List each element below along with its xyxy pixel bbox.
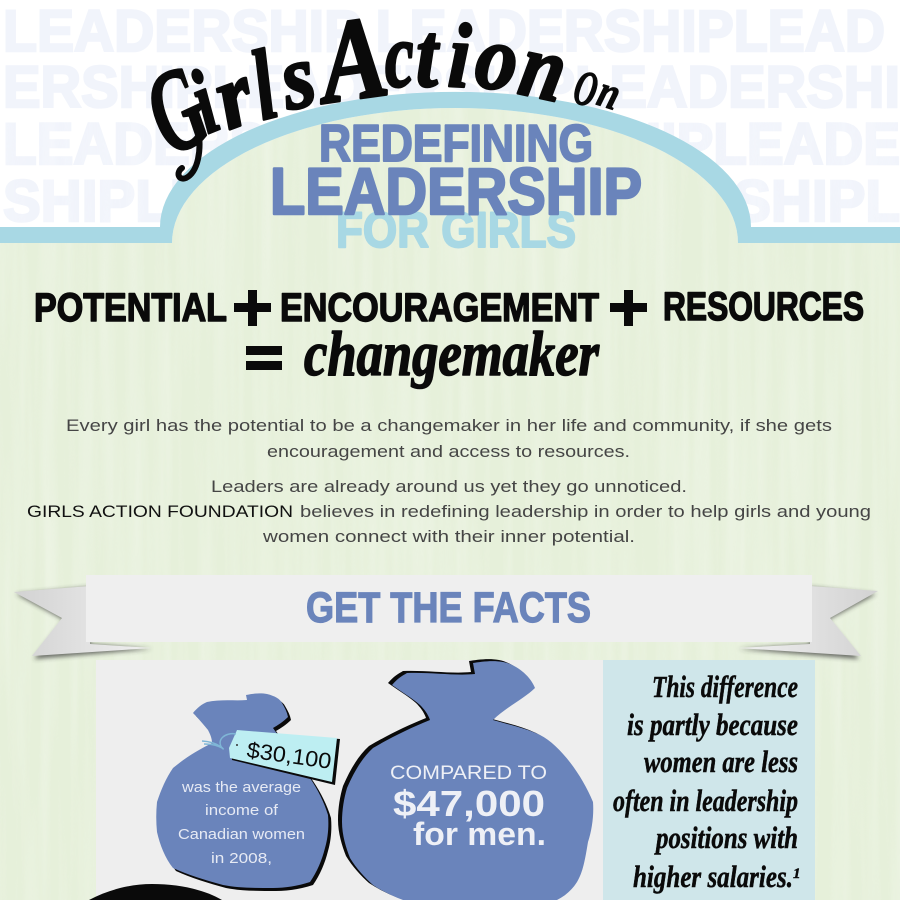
intro text: GIRLS ACTION FOUNDATION	[27, 502, 293, 521]
title: Girls Action On: r	[200, 42, 268, 149]
icon: small money bag	[156, 693, 331, 891]
equation: changemaker	[304, 318, 600, 389]
wallpaper: repeated LEADERSHIP: SHIPLEADERSHIPLEADERSHIPL	[3, 169, 900, 234]
title: Girls Action On: c	[382, 5, 416, 108]
title: Redefining Leadership for Girls: REDEFINING	[319, 115, 593, 173]
title: Redefining Leadership for Girls: LEADERSHIP	[270, 154, 642, 228]
intro text: encouragement and access to resources.	[267, 442, 630, 461]
small bag text: Canadian women	[178, 826, 305, 843]
panel: explanation: positions with	[654, 820, 798, 855]
title: Girls Action On: n	[512, 14, 575, 122]
title: Girls Action On: o	[471, 5, 524, 111]
big bag text: for men.	[413, 816, 546, 852]
small bag text	[178, 779, 305, 867]
intro text: Every girl has the potential to be a changemaker in her life and community, if she gets	[66, 416, 832, 435]
title: Girls Action On: i	[446, 5, 473, 108]
title: Girls Action On: t	[416, 5, 440, 106]
icon: price tag $30,100: $30,100	[245, 737, 333, 774]
small bag text: in 2008,	[211, 850, 272, 867]
small bag text: was the average	[181, 779, 301, 796]
panel: explanation: women are less	[644, 744, 798, 779]
title: Girls Action On: i	[177, 52, 231, 153]
panel: explanation: 1	[793, 866, 800, 882]
panel: income comparison	[96, 660, 603, 900]
title: Girls Action On	[126, 0, 627, 179]
title: Girls Action On: O	[568, 59, 603, 118]
arch and band	[0, 92, 900, 243]
big bag text: COMPARED TO	[390, 763, 547, 784]
title: Redefining Leadership for Girls: FOR GIRLS	[336, 202, 576, 258]
icon: large money bag	[338, 659, 593, 900]
title: Girls Action On: s	[270, 23, 324, 130]
intro text: believes in redefining leadership in order to help girls and young	[300, 502, 871, 521]
big bag text: $47,000	[393, 783, 545, 824]
equation	[34, 285, 864, 389]
wallpaper: repeated LEADERSHIP	[3, 0, 900, 234]
icon: price tag $30,100	[202, 730, 340, 785]
title: Girls Action On: G	[126, 41, 226, 179]
panel: explanation: often in leadership	[613, 783, 798, 818]
panel: explanation: is partly because	[627, 707, 798, 742]
title: Girls Action On: l	[240, 28, 287, 141]
intro text: women connect with their inner potential.	[262, 527, 635, 546]
equation: ENCOURAGEMENT	[280, 286, 599, 330]
panel: explanation: This difference	[652, 669, 798, 704]
title: Girls Action On: n	[592, 66, 627, 121]
ribbon banner	[14, 575, 878, 659]
intro text	[27, 416, 871, 546]
title: Redefining Leadership for Girls	[270, 115, 642, 258]
small bag text: income of	[205, 802, 279, 819]
equation: POTENTIAL	[34, 286, 227, 330]
intro text: Leaders are already around us yet they go unnoticed.	[211, 477, 687, 496]
panel: explanation: higher salaries.	[633, 859, 793, 894]
heading: get the facts: GET THE FACTS	[306, 584, 591, 632]
icon: black circle, cropped	[89, 884, 222, 900]
big bag text	[390, 763, 547, 852]
panel: explanation	[603, 660, 815, 900]
